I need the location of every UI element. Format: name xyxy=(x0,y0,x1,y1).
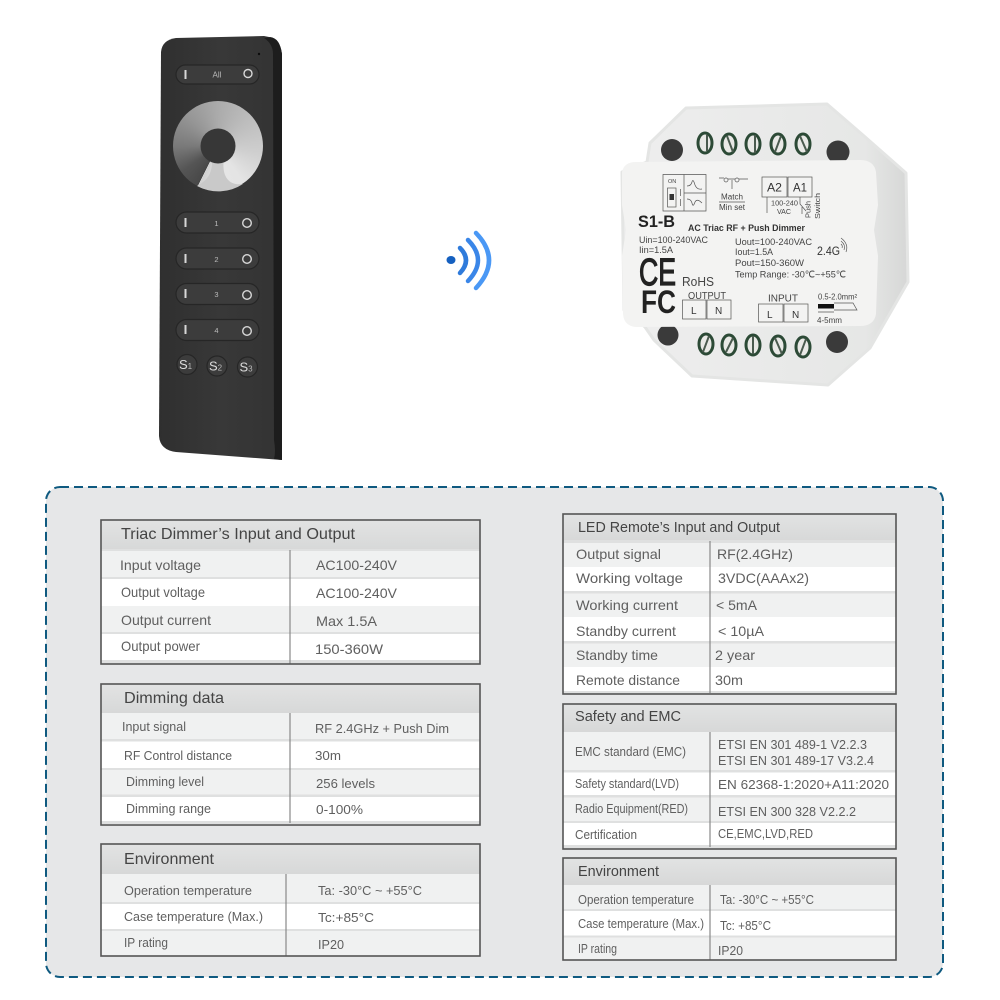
table: Environment (dimmer): Environment xyxy=(124,851,215,868)
wire strip diagram: 0.5-2.0mm² xyxy=(818,292,857,302)
DIP switch diagram: ON xyxy=(668,179,676,185)
input terminals: N xyxy=(792,310,799,321)
top terminal screws xyxy=(698,133,810,154)
table: Triac Dimmer's Input and Output: Input voltage xyxy=(120,557,201,573)
table: Triac Dimmer's Input and Output: Output current xyxy=(121,612,211,628)
table: Safety and EMC: ETSI EN 301 489-1 V2.2.3 xyxy=(718,737,867,752)
2.4G wireless mark xyxy=(817,238,847,258)
A2 A1 terminals xyxy=(762,177,822,219)
table: Safety and EMC: Certification xyxy=(575,827,637,842)
table: Safety and EMC: EMC standard (EMC) xyxy=(575,744,686,759)
table: Dimming data: Dimming range xyxy=(126,801,211,816)
button: S1 xyxy=(177,354,197,374)
CE mark: CE xyxy=(639,252,676,294)
table: Safety and EMC: ETSI EN 301 489-17 V3.2.4 xyxy=(718,753,874,768)
output terminals: N xyxy=(715,306,722,317)
table: Environment (dimmer): IP20 xyxy=(318,937,344,952)
table: LED Remote's Input and Output xyxy=(563,514,896,694)
table: Triac Dimmer's Input and Output: Max 1.5A xyxy=(316,613,378,629)
button: zone 2 xyxy=(176,248,259,269)
panel: specifications xyxy=(46,487,943,977)
button: All: All xyxy=(213,70,222,80)
DIP switch diagram xyxy=(663,174,706,211)
table: Dimming data: Dimming data xyxy=(124,690,224,707)
button: S3 xyxy=(238,357,258,377)
mounting holes xyxy=(658,139,850,353)
dashed panel frame xyxy=(46,487,943,977)
table: Dimming data: RF Control distance xyxy=(124,748,232,763)
output ratings: Iout=1.5A xyxy=(735,247,774,258)
table: LED Remote's Input and Output: < 10µA xyxy=(718,623,765,639)
table: Safety and EMC: Radio Equipment(RED) xyxy=(575,801,688,816)
output terminals: OUTPUT xyxy=(688,291,726,302)
table: Environment (dimmer): Tc:+85°C xyxy=(318,910,374,925)
table: Environment (remote) xyxy=(563,858,896,960)
table: Dimming data: RF 2.4GHz + Push Dim xyxy=(315,721,449,736)
output ratings: Uout=100-240VAC xyxy=(735,237,812,248)
table: Environment (remote): Operation temperature xyxy=(578,892,694,907)
match button diagram: Min set xyxy=(719,203,746,212)
button: All xyxy=(176,65,259,84)
table: LED Remote's Input and Output: Working voltage xyxy=(576,570,683,586)
table: Safety and EMC xyxy=(563,704,896,849)
input ratings: Uin=100-240VAC xyxy=(639,235,708,246)
table: Dimming data: Dimming level xyxy=(126,774,204,789)
table: LED Remote's Input and Output: RF(2.4GHz) xyxy=(717,546,793,562)
table: Dimming data: Input signal xyxy=(122,719,186,734)
table: Safety and EMC: Safety and EMC xyxy=(575,708,681,725)
table: Dimming data xyxy=(101,684,480,825)
wire strip diagram xyxy=(817,292,857,325)
button: zone 1 xyxy=(176,212,259,233)
button: zone 4 xyxy=(176,320,259,340)
input terminals xyxy=(758,292,808,322)
table: Environment (dimmer) xyxy=(101,844,480,956)
table: Triac Dimmer's Input and Output: Output power xyxy=(121,638,200,654)
table: Triac Dimmer's Input and Output: 150-360W xyxy=(315,641,384,657)
table: LED Remote's Input and Output: < 5mA xyxy=(716,597,758,613)
dimmer module xyxy=(622,104,908,385)
table: Triac Dimmer's Input and Output xyxy=(101,520,480,664)
button: S3: S3 xyxy=(240,360,253,374)
button: zone 2: 2 xyxy=(214,255,219,264)
table: Safety and EMC: ETSI EN 300 328 V2.2.2 xyxy=(718,804,856,819)
A2 A1 terminals: 100-240 xyxy=(771,198,798,208)
table: LED Remote's Input and Output: Standby current xyxy=(576,623,676,639)
button: zone 3 xyxy=(176,284,259,304)
table: LED Remote's Input and Output: Output signal xyxy=(576,546,661,562)
input ratings xyxy=(639,235,708,256)
table: LED Remote's Input and Output: Remote distance xyxy=(576,672,680,688)
output terminals xyxy=(682,291,731,319)
table: LED Remote's Input and Output: 30m xyxy=(715,672,743,688)
colour wheel xyxy=(173,101,263,191)
FCC mark: FC xyxy=(641,284,676,320)
table: Safety and EMC: Safety standard(LVD) xyxy=(575,776,679,791)
icon: wireless signal xyxy=(446,233,489,288)
remote body xyxy=(159,36,282,460)
A2 A1 terminals: A1 xyxy=(793,180,807,194)
output ratings: Pout=150-360W xyxy=(735,258,804,269)
table: Environment (remote): Case temperature (Max.) xyxy=(578,916,704,931)
indicator dot xyxy=(258,53,260,55)
button: zone 3: 3 xyxy=(214,290,219,299)
A2 A1 terminals: A2 xyxy=(767,180,782,194)
button: zone 1: 1 xyxy=(214,219,219,228)
button: zone 4: 4 xyxy=(214,326,219,335)
table: LED Remote's Input and Output: Working current xyxy=(576,597,678,613)
table: LED Remote's Input and Output: Standby time xyxy=(576,647,658,663)
module front face xyxy=(622,160,878,327)
match button diagram: Match xyxy=(721,192,743,202)
remote control xyxy=(159,36,282,460)
bottom terminal screws xyxy=(699,334,810,357)
table: Environment (remote): Environment xyxy=(578,863,660,880)
table: Triac Dimmer's Input and Output: AC100-240V xyxy=(316,557,398,573)
module shell xyxy=(622,104,908,385)
match button diagram xyxy=(719,178,748,212)
2.4G wireless mark: 2.4G xyxy=(817,244,840,258)
table: Triac Dimmer's Input and Output: AC100-240V xyxy=(316,585,398,601)
table: LED Remote's Input and Output: LED Remote’s Input and Output xyxy=(578,519,781,536)
output terminals: L xyxy=(691,306,697,317)
button: S1: S1 xyxy=(179,357,193,372)
table: Triac Dimmer's Input and Output: Output voltage xyxy=(121,584,205,600)
button: S2 xyxy=(207,356,227,376)
A2 A1 terminals: Switch xyxy=(813,193,822,219)
table: Environment (dimmer): Operation temperature xyxy=(124,883,252,898)
table: LED Remote's Input and Output: 3VDC(AAAx2) xyxy=(718,570,809,586)
model name: S1-B xyxy=(638,212,675,231)
A2 A1 terminals: VAC xyxy=(777,207,792,216)
output ratings: Temp Range: -30℃~+55℃ xyxy=(735,270,846,280)
table: Dimming data: 0-100% xyxy=(316,802,363,817)
table: Environment (remote): IP20 xyxy=(718,943,743,958)
table: Dimming data: 30m xyxy=(315,748,341,763)
output ratings xyxy=(735,237,846,280)
table: Environment (remote): Ta: -30°C ~ +55°C xyxy=(720,892,814,907)
A2 A1 terminals: Push xyxy=(804,201,812,218)
table: Environment (dimmer): Case temperature (Max.) xyxy=(124,909,263,924)
product title: AC Triac RF + Push Dimmer xyxy=(688,223,805,234)
input terminals: L xyxy=(767,310,773,321)
wire strip diagram: 4-5mm xyxy=(817,316,842,325)
input ratings: Iin=1.5A xyxy=(639,245,674,256)
table: Environment (remote): Tc: +85°C xyxy=(720,918,771,933)
table: Safety and EMC: EN 62368-1:2020+A11:2020 xyxy=(718,777,889,792)
table: Environment (dimmer): Ta: -30°C ~ +55°C xyxy=(318,883,422,898)
RoHS label: RoHS xyxy=(682,274,714,289)
input terminals: INPUT xyxy=(768,292,799,304)
table: Dimming data: 256 levels xyxy=(316,776,375,791)
table: Safety and EMC: CE,EMC,LVD,RED xyxy=(718,826,813,841)
table: Triac Dimmer's Input and Output: Triac Dimmer’s Input and Output xyxy=(121,526,356,543)
table: Environment (dimmer): IP rating xyxy=(124,935,168,950)
table: LED Remote's Input and Output: 2 year xyxy=(715,647,755,663)
button: S2: S2 xyxy=(209,358,223,374)
table: Environment (remote): IP rating xyxy=(578,941,617,956)
remote right edge xyxy=(264,37,282,460)
